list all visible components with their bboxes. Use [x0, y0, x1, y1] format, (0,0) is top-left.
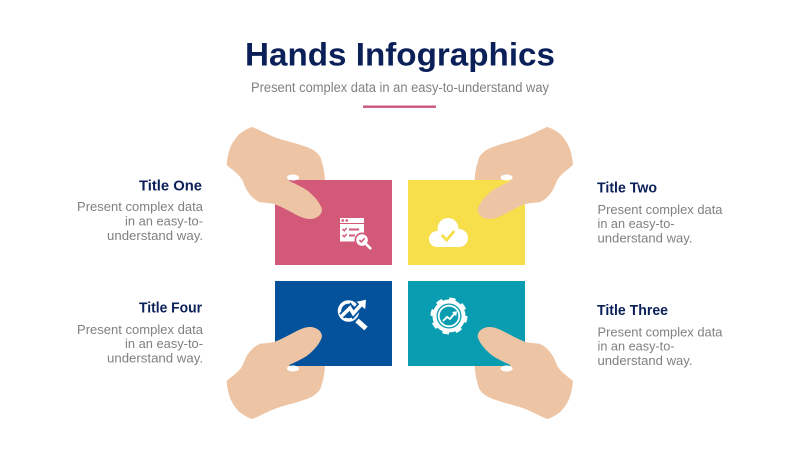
hand: bottom left: [227, 327, 325, 419]
title underline: [363, 106, 436, 108]
text block: title four: Title Four: [139, 300, 202, 316]
text block: title one: [77, 178, 203, 243]
text block: title two: Present complex data: [598, 203, 723, 217]
text block: title one: Title One: [139, 178, 202, 194]
text block: title four: Present complex data: [77, 323, 203, 337]
text block: title three: in an easy-to-: [598, 340, 674, 354]
text block: title four: [77, 300, 203, 366]
panel: card three (teal): [408, 281, 525, 366]
hand: bottom right: [475, 327, 573, 419]
icon: cloud with check: [429, 218, 468, 247]
text block: title three: Present complex data: [598, 326, 723, 340]
text block: title three: [597, 302, 723, 368]
text block: title two: [597, 180, 723, 246]
hand: top left: [227, 127, 325, 219]
text block: title two: in an easy-to-: [598, 217, 674, 231]
hand: top right: [475, 127, 573, 219]
panel: card four (blue): [275, 281, 392, 366]
panel: card one (pink): [275, 180, 392, 265]
text block: title three: Title Three: [597, 302, 668, 319]
text block: title two: Title Two: [597, 180, 657, 196]
text block: title four: understand way.: [107, 352, 203, 366]
text block: title one: in an easy-to-: [125, 214, 203, 228]
text block: title two: understand way.: [598, 232, 692, 246]
panel: card two (yellow): [408, 180, 525, 265]
icon: magnifier with growth arrow: [340, 300, 366, 328]
text block: title one: understand way.: [107, 229, 203, 243]
icon: gear with chart arrow: [432, 299, 466, 333]
subtitle: Present complex data in an easy-to-understand way: [251, 80, 549, 95]
title: Hands Infographics: [245, 36, 555, 72]
text block: title three: understand way.: [598, 354, 692, 368]
text block: title four: in an easy-to-: [125, 337, 203, 351]
text block: title one: Present complex data: [77, 200, 203, 214]
icon: checklist with magnifier: [340, 218, 370, 248]
